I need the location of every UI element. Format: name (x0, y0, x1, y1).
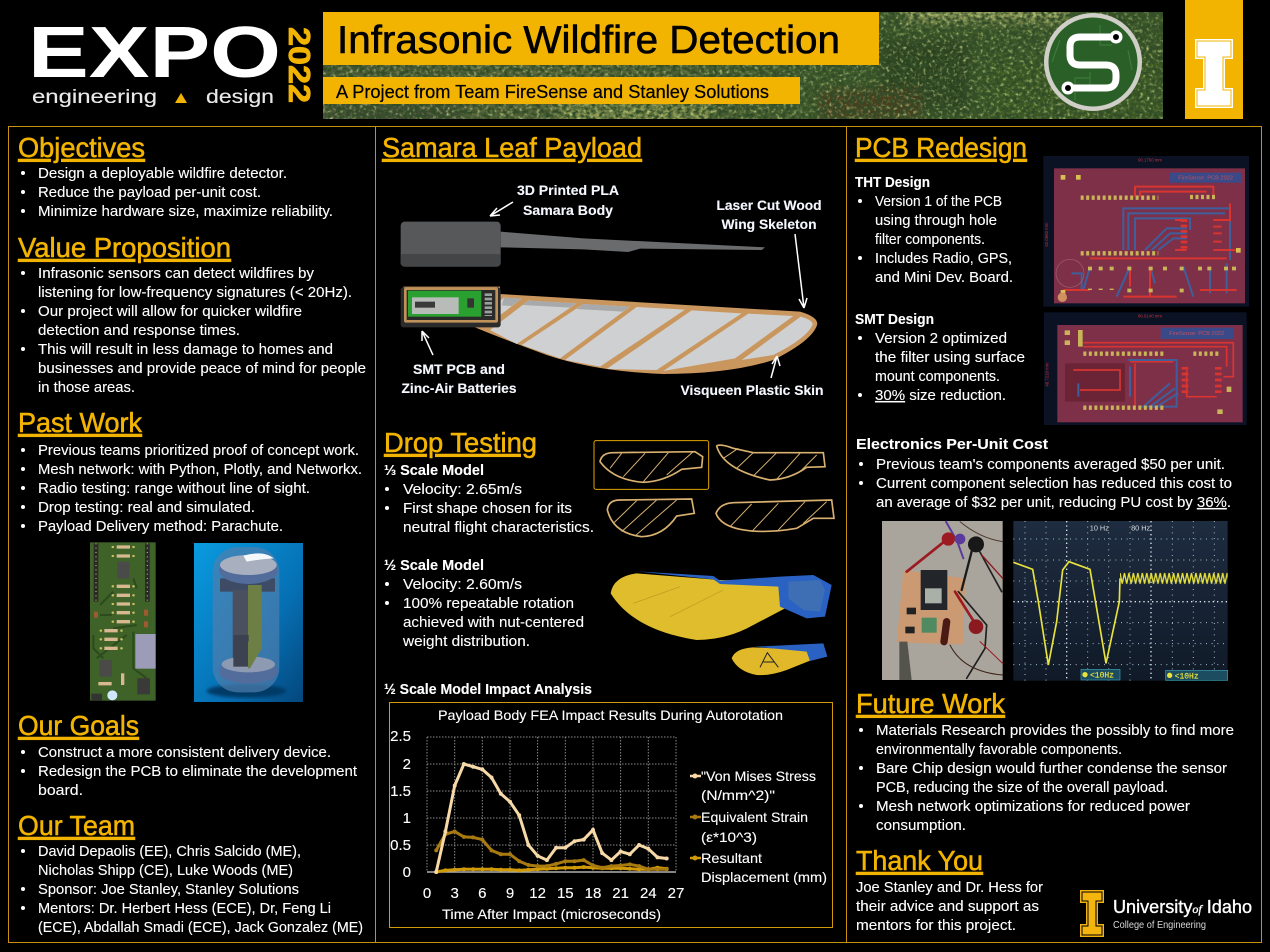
text block: objectives: Design a deployable wildfire detector. (38, 166, 287, 182)
text block: SMT design: Version 2 optimized (875, 331, 1007, 347)
heading: our goals: Our Goals (18, 710, 139, 741)
text block: future work (859, 723, 1234, 834)
diagram: wing with PCB (401, 287, 817, 374)
heading: past work: Past Work (18, 407, 143, 438)
series: resultant displacement (436, 867, 667, 872)
panel: drop testing (384, 427, 834, 928)
panel: our goals (18, 710, 357, 799)
y axis labels: 1.5 (390, 783, 411, 800)
text block: past work: Previous teams prioritized proof of concept work. (38, 443, 359, 459)
text block: thank you: mentors for this project. (856, 918, 1016, 934)
text block: one-half scale model: weight distribution. (402, 634, 530, 650)
subtitle bar: A Project from Team FireSense and Stanley Solutions (336, 81, 769, 102)
text block: objectives: Minimize hardware size, maximize reliability. (38, 204, 333, 220)
text block: future work: consumption. (876, 818, 966, 834)
image: SMT PCB layout: 46.7210 mm (1045, 362, 1050, 387)
image: small yellow wing marked A (732, 643, 827, 675)
x axis labels: 9 (506, 885, 514, 902)
text block: one-half scale model: 100% repeatable rotation (403, 596, 574, 612)
text block: electronics per-unit cost: Electronics Per-Unit Cost (856, 437, 1048, 453)
text block: one-half scale model (384, 558, 584, 650)
text block: our team: (ECE), Abdallah Smadi (ECE), Jack Gonzalez (ME) (38, 920, 363, 936)
image: THT PCB layout (1043, 156, 1249, 307)
text block: our goals (21, 745, 357, 799)
legend: Displacement (mm) (701, 869, 827, 885)
text block: future work: Mesh network optimizations for reduced power (876, 799, 1190, 815)
text block: THT design: filter components. (875, 232, 985, 248)
x axis labels: 27 (668, 885, 684, 902)
panel: thank you (856, 845, 1252, 937)
heading: future work: Future Work (856, 688, 1006, 719)
callout: visqueen plastic skin (680, 356, 824, 398)
text block: thank you: their advice and support as (856, 899, 1039, 915)
y axis labels: 2 (403, 756, 411, 773)
x axis labels: 15 (557, 885, 574, 902)
logo: EXPO 2022 engineering design: engineering (32, 87, 157, 108)
text block: THT design: Includes Radio, GPS, (875, 251, 1012, 267)
panel: future work (856, 688, 1234, 834)
x axis labels: 12 (529, 885, 546, 902)
y axis labels: 1 (403, 810, 411, 827)
image: oscilloscope trace (1013, 521, 1228, 681)
legend: (ε*10^3) (701, 829, 757, 845)
callout: 3D printed PLA samara body: 3D Printed PLA (517, 182, 619, 198)
text block: SMT design: 30% size reduction. (875, 388, 1006, 404)
x axis labels: 21 (612, 885, 629, 902)
text block: value proposition: Our project will allow for quicker wildfire (38, 304, 302, 320)
heading: PCB redesign: PCB Redesign (855, 132, 1027, 163)
text block: one-half scale model: Velocity: 2.60m/s (403, 577, 522, 593)
callout: laser cut wood wing skeleton: Laser Cut Wood (716, 197, 822, 213)
image: THT PCB layout: 90.1760 mm (1138, 157, 1162, 162)
title bar: Infrasonic Wildfire Detection (337, 19, 840, 62)
legend: Equivalent Strain (701, 809, 808, 825)
logo: EXPO 2022 engineering design: 2022 (282, 27, 317, 103)
text block: THT design: and Mini Dev. Board. (875, 270, 1013, 286)
x axis labels: 18 (585, 885, 601, 902)
logo: EXPO 2022 engineering design: EXPO (28, 13, 281, 93)
image: oscilloscope trace: 80 Hz (1131, 523, 1151, 532)
legend: (N/mm^2)" (701, 787, 775, 803)
text block: our team: Nicholas Shipp (CE), Luke Woods (ME) (38, 863, 293, 879)
images: four wing skeleton shapes (594, 441, 834, 537)
series: equivalent strain (436, 832, 667, 869)
text block: SMT design: the filter using surface (875, 350, 1025, 366)
callout: SMT PCB and zinc-air batteries (402, 331, 517, 396)
callout: laser cut wood wing skeleton: Wing Skeleton (722, 216, 816, 232)
image: parachute capsule render (194, 543, 303, 702)
text block: SMT design (855, 312, 1025, 404)
text block: future work: Materials Research provides the possibly to find more (876, 723, 1234, 739)
text block: THT design: using through hole (875, 213, 997, 229)
x axis labels: 6 (478, 885, 486, 902)
callout: SMT PCB and zinc-air batteries: SMT PCB and (413, 361, 505, 377)
banner: forest photo (323, 12, 1163, 119)
image: oscilloscope trace: 10 Hz (1090, 523, 1109, 532)
image: THT PCB layout: 62.0660 mm (1044, 222, 1049, 247)
text block: past work: Mesh network: with Python, Plotly, and Networkx. (38, 462, 362, 478)
text block: objectives (21, 166, 333, 220)
text block: one-half scale model: ½ Scale Model (384, 558, 484, 574)
panel: samara leaf payload (382, 132, 824, 398)
image: SMT PCB layout: 86.6140 mm (1138, 314, 1162, 319)
text block: value proposition: in those areas. (38, 380, 135, 396)
callout: 3D printed PLA samara body (490, 182, 619, 218)
line chart: FEA impact results (390, 702, 832, 928)
text block: our goals: board. (38, 783, 83, 799)
text block: thank you: Joe Stanley and Dr. Hess for (856, 880, 1043, 896)
text block: past work: Drop testing: real and simulated. (38, 500, 255, 516)
text block: value proposition: detection and response times. (38, 323, 240, 339)
subheading: impact analysis: ½ Scale Model Impact Analysis (384, 682, 592, 698)
legend: Resultant (701, 850, 762, 866)
logo: University of Idaho College of Engineering: College of Engineering (1113, 919, 1206, 931)
text block: electronics per-unit cost: Previous team's components averaged $50 per unit. (876, 457, 1225, 473)
x axis labels (423, 885, 684, 902)
text block: future work: PCB, reducing the size of the overall payload. (876, 780, 1168, 796)
legend: "Von Mises Stress (701, 768, 816, 784)
logo: EXPO 2022 engineering design: design (206, 87, 274, 108)
image: assembled test board photo (882, 521, 1003, 680)
text block: value proposition: listening for low-frequency signatures (< 20Hz). (38, 285, 352, 301)
text block: THT design: THT Design (855, 175, 930, 191)
text block: electronics per-unit cost: an average of $32 per unit, reducing PU cost by 36%. (876, 495, 1231, 511)
text block: one-third scale model: First shape chosen for its (403, 501, 572, 517)
image: THT PCB layout: FireSense: PCB 2022 (1178, 175, 1233, 181)
panel: past work (18, 407, 362, 702)
text block: future work: Bare Chip design would further condense the sensor (876, 761, 1227, 777)
text block: SMT design: mount components. (875, 369, 1000, 385)
x axis labels: 0 (423, 885, 431, 902)
callout: 3D printed PLA samara body: Samara Body (523, 202, 613, 218)
icon: Idaho block I (1185, 0, 1243, 119)
text block: one-third scale model (384, 463, 594, 536)
callout: SMT PCB and zinc-air batteries: Zinc-Air Batteries (402, 380, 517, 396)
text block: one-half scale model: achieved with nut-centered (403, 615, 584, 631)
y axis labels: 2.5 (390, 728, 411, 745)
text block: our goals: Construct a more consistent delivery device. (38, 745, 331, 761)
chart title: Payload Body FEA Impact Results During Autorotation (438, 707, 783, 723)
text block: our goals: Redesign the PCB to eliminate the development (38, 764, 357, 780)
logo: University of Idaho College of Engineering (1080, 890, 1252, 937)
panel: PCB redesign (855, 132, 1249, 681)
heading: objectives: Objectives (18, 132, 145, 163)
text block: past work: Payload Delivery method: Parachute. (38, 519, 283, 535)
callout: laser cut wood wing skeleton (716, 197, 822, 308)
text block: our team (21, 844, 363, 936)
text block: THT design: Version 1 of the PCB (875, 194, 1002, 210)
panel: our team (18, 810, 363, 936)
y axis labels (390, 728, 411, 881)
text block: thank you (856, 880, 1043, 934)
heading: samara leaf payload: Samara Leaf Payload (382, 132, 642, 163)
text block: our team: Sponsor: Joe Stanley, Stanley Solutions (38, 882, 299, 898)
heading: our team: Our Team (18, 810, 135, 841)
text block: value proposition: businesses and provide peace of mind for people (38, 361, 366, 377)
image: oscilloscope trace: <10Hz (1175, 672, 1199, 681)
panel: objectives (18, 132, 333, 220)
text block: past work: Radio testing: range without line of sight. (38, 481, 310, 497)
legend (690, 768, 827, 885)
image: oscilloscope trace: <10Hz (1090, 672, 1114, 681)
text block: objectives: Reduce the payload per-unit cost. (38, 185, 261, 201)
image: previous PCB render (90, 542, 156, 701)
text block: value proposition: Infrasonic sensors can detect wildfires by (38, 266, 315, 282)
text block: our team: Mentors: Dr. Herbert Hess (ECE), Dr, Feng Li (38, 901, 331, 917)
text block: one-third scale model: neutral flight characteristics. (403, 520, 594, 536)
heading: thank you: Thank You (856, 845, 983, 876)
text block: value proposition: This will result in less damage to homes and (38, 342, 333, 358)
x axis labels: 3 (451, 885, 459, 902)
x axis labels: 24 (640, 885, 657, 902)
text block: SMT design: SMT Design (855, 312, 934, 328)
text block: one-third scale model: ⅓ Scale Model (384, 463, 484, 479)
text block: one-third scale model: Velocity: 2.65m/s (403, 482, 522, 498)
text block: past work (21, 443, 362, 535)
y axis labels: 0.5 (390, 837, 411, 854)
y axis labels: 0 (403, 864, 411, 881)
series: von Mises stress (436, 764, 667, 872)
callout: visqueen plastic skin: Visqueen Plastic Skin (680, 382, 824, 398)
text block: electronics per-unit cost: Current component selection has reduced this cost to (876, 476, 1232, 492)
text block: THT design (855, 175, 1013, 286)
logo: EXPO 2022 engineering design (28, 13, 317, 108)
text block: our team: David Depaolis (EE), Chris Salcido (ME), (38, 844, 301, 860)
heading: drop testing: Drop Testing (384, 427, 537, 458)
text block: future work: environmentally favorable components. (876, 742, 1122, 758)
image: SMT PCB layout (1044, 312, 1247, 425)
text block: value proposition (21, 266, 366, 396)
panel: value proposition (18, 232, 366, 396)
diagram: samara body (401, 222, 765, 267)
icon: Stanley Solutions S logo (1044, 13, 1142, 111)
text block: electronics per-unit cost (856, 437, 1232, 511)
logo: University of Idaho College of Engineering: Universityof Idaho (1113, 897, 1252, 917)
image: SMT PCB layout: FireSense: PCB 2022 (1169, 331, 1224, 337)
image: half scale yellow wing (611, 571, 832, 640)
x axis title: Time After Impact (microseconds) (442, 906, 661, 922)
heading: value proposition: Value Proposition (18, 232, 231, 263)
